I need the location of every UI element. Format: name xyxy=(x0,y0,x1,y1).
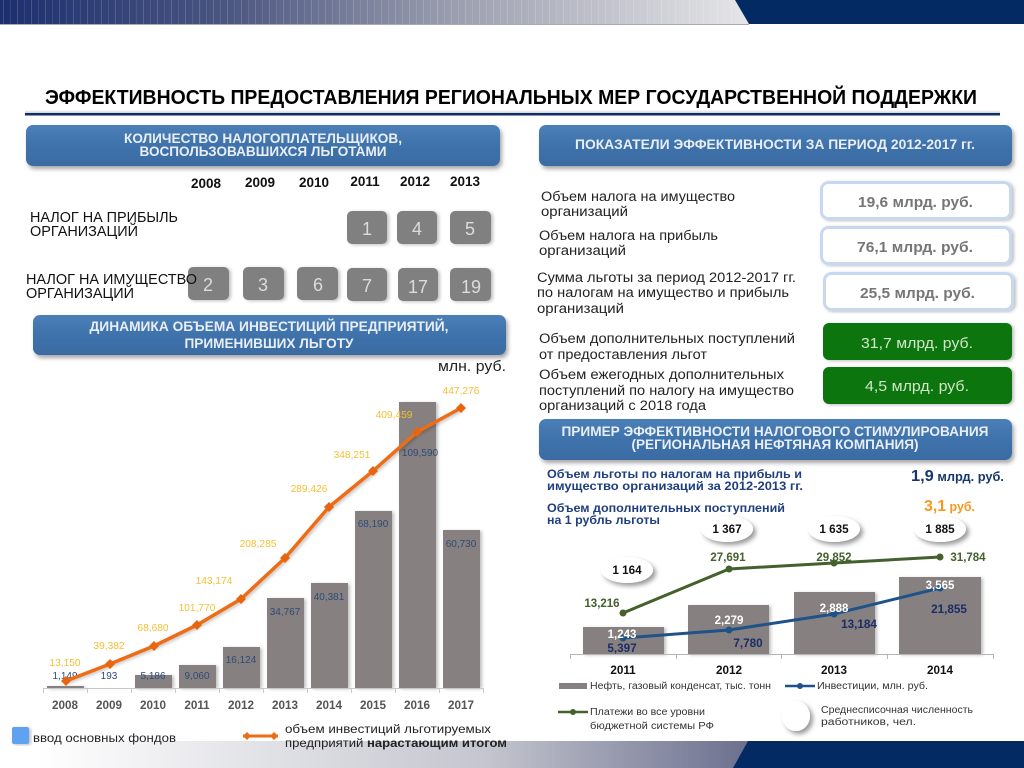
indicator text: annual revenue: организаций с 2018 года xyxy=(539,398,707,413)
indicator value: annual revenue xyxy=(823,367,1012,404)
count tiles: property tax: 17 xyxy=(408,277,428,297)
indicator text: additional revenue xyxy=(539,331,795,362)
line: cumulative investment xyxy=(61,403,466,686)
legend: fixed assets: ввод основных фондов xyxy=(33,731,176,745)
legend: average headcount: работников, чел. xyxy=(821,716,916,728)
x axis years: 2012 xyxy=(228,699,254,712)
x axis years: 2008 xyxy=(52,699,78,712)
panel: taxpayers count xyxy=(26,125,500,302)
relief volume value: 1,9 млрд. руб. xyxy=(911,468,1004,485)
revenue per ruble text: на 1 рубль льготы xyxy=(547,513,660,527)
heading: taxpayers xyxy=(26,125,500,166)
count tiles: property tax: 6 xyxy=(313,275,323,295)
revenue per ruble value: 3,1 руб. xyxy=(924,498,975,515)
heading: efficiency indicators: ПОКАЗАТЕЛИ ЭФФЕКТИВНОСТИ ЗА ПЕРИОД 2012-2017 гг. xyxy=(575,137,975,152)
legend: oil output: Нефть, газовый конденсат, тыс. тонн xyxy=(590,680,771,692)
relief volume text: Объем льготы по налогам на прибыль и xyxy=(547,467,802,481)
line value labels: 143,174 xyxy=(196,576,233,587)
line value labels: 39,382 xyxy=(93,641,125,652)
payment value labels xyxy=(584,552,986,610)
indicator value: total relief: 25,5 млрд. руб. xyxy=(860,286,975,302)
revenue per ruble text: Объем дополнительных поступлений xyxy=(547,501,785,515)
x axis years: 2015 xyxy=(360,699,386,712)
heading: oil company example: (РЕГИОНАЛЬНАЯ НЕФТЯНАЯ КОМПАНИЯ) xyxy=(632,437,918,452)
payment value labels: 13,216 xyxy=(584,598,620,610)
legend: cumulative investment: предприятий нарастающим итогом xyxy=(285,736,507,750)
investment value labels: 7,780 xyxy=(733,637,763,650)
legend: investments: Инвестиции, млн. руб. xyxy=(817,680,928,692)
bar value labels: 34,767 xyxy=(270,607,301,618)
indicator text: total relief: Сумма льготы за период 2012-2017 гг. xyxy=(537,270,796,285)
line value labels: 101,770 xyxy=(179,603,216,614)
heading: oil company example xyxy=(539,419,1012,460)
line value labels: 13,150 xyxy=(49,658,81,669)
line: investments xyxy=(620,584,944,642)
count tiles: property tax: 2 xyxy=(203,275,213,295)
x axis years xyxy=(610,664,953,677)
indicator text: annual revenue: поступлений по налогу на имущество xyxy=(539,383,794,398)
heading: taxpayers: ВОСПОЛЬЗОВАВШИХСЯ ЛЬГОТАМИ xyxy=(140,144,386,159)
bubbles: average headcount: 1 635 xyxy=(819,523,849,536)
investment value labels: 21,855 xyxy=(931,603,967,616)
row label: property tax: НАЛОГ НА ИМУЩЕСТВО xyxy=(26,272,197,288)
year headers xyxy=(191,174,481,191)
x axis years: 2014 xyxy=(927,664,953,677)
bottom banner xyxy=(0,741,1024,768)
indicator text: total relief xyxy=(537,270,796,316)
legend: investments xyxy=(785,680,928,692)
indicator text: profit tax: Объем налога на прибыль xyxy=(539,228,718,243)
payment value labels: 29,852 xyxy=(816,552,852,564)
x axis years: 2010 xyxy=(140,699,166,712)
bar value labels: 1,149 xyxy=(52,671,78,682)
bubbles: average headcount: 1 164 xyxy=(612,564,642,577)
oil output value labels: 2,279 xyxy=(715,615,743,627)
indicator text: profit tax: организаций xyxy=(539,243,626,258)
line value labels: 409,459 xyxy=(376,410,413,421)
indicator value: annual revenue: 4,5 млрд. руб. xyxy=(865,379,969,395)
chart axis xyxy=(44,688,484,693)
indicator text: property tax xyxy=(541,189,735,219)
year headers: 2010 xyxy=(299,175,329,190)
chart axis xyxy=(570,654,994,659)
line value labels: 447,276 xyxy=(443,386,480,397)
line: budget payments xyxy=(620,554,944,616)
investment value labels: 5,397 xyxy=(607,642,637,655)
indicator text: annual revenue: Объем ежегодных дополнительных xyxy=(539,367,784,382)
investment value labels: 13,184 xyxy=(841,618,877,631)
oil output value labels: 1,243 xyxy=(608,629,636,641)
indicator value: property tax xyxy=(822,182,1010,218)
legend: average headcount: Среднесписочная численность xyxy=(821,705,973,716)
bar value labels: 40,381 xyxy=(314,592,345,603)
bubbles: average headcount: 1 367 xyxy=(712,523,742,536)
legend: cumulative investment xyxy=(243,722,507,750)
year headers: 2009 xyxy=(245,175,275,190)
row label: profit tax xyxy=(30,210,178,240)
indicator value: total relief xyxy=(824,274,1012,310)
x axis years: 2014 xyxy=(316,699,342,712)
year headers: 2011 xyxy=(350,174,380,189)
bar value labels: 193 xyxy=(101,671,118,682)
indicator value: additional revenue: 31,7 млрд. руб. xyxy=(861,336,973,352)
indicator text: annual revenue xyxy=(539,367,794,413)
row label: property tax xyxy=(26,272,197,302)
legend: budget payments: Платежи во все уровни xyxy=(590,707,705,718)
x axis years: 2013 xyxy=(272,699,298,712)
count tiles: profit tax: 5 xyxy=(465,219,475,239)
legend: budget payments: бюджетной системы РФ xyxy=(590,720,714,732)
x axis years: 2016 xyxy=(404,699,430,712)
payment value labels: 31,784 xyxy=(950,552,986,564)
x axis years: 2011 xyxy=(184,699,210,712)
indicator text: additional revenue: Объем дополнительных поступлений xyxy=(539,331,795,346)
bar value labels: 5,186 xyxy=(140,671,166,682)
oil output value labels: 2,888 xyxy=(820,603,849,615)
relief volume text: имущество организаций за 2012-2013 гг. xyxy=(547,479,803,493)
line value labels: 348,251 xyxy=(334,450,371,461)
panel: investment dynamics xyxy=(12,315,507,750)
x axis years: 2009 xyxy=(96,699,122,712)
oil output value labels: 3,565 xyxy=(926,580,955,592)
heading: investment dynamics xyxy=(33,315,506,355)
count tiles: profit tax: 4 xyxy=(412,219,422,239)
heading: efficiency indicators xyxy=(539,125,1012,166)
heading: taxpayers: КОЛИЧЕСТВО НАЛОГОПЛАТЕЛЬЩИКОВ, xyxy=(124,131,402,146)
row label: profit tax: НАЛОГ НА ПРИБЫЛЬ xyxy=(30,210,178,226)
bar chart: oil output xyxy=(583,577,981,654)
bar value labels: 9,060 xyxy=(184,671,210,682)
indicator text: total relief: организаций xyxy=(537,301,624,316)
indicator value: property tax: 19,6 млрд. руб. xyxy=(858,195,973,211)
bar value labels xyxy=(52,448,477,682)
count tiles: property tax: 3 xyxy=(258,275,268,295)
oil output value labels xyxy=(608,580,955,641)
indicator text: additional revenue: от предоставления льгот xyxy=(539,347,707,362)
top banner xyxy=(0,0,1024,25)
investment value labels xyxy=(607,603,967,655)
bar value labels: 68,190 xyxy=(358,519,389,530)
x axis years: 2013 xyxy=(821,664,847,677)
indicator text: property tax: организаций xyxy=(541,204,628,219)
x axis years: 2011 xyxy=(610,664,636,677)
legend: cumulative investment: объем инвестиций льготируемых xyxy=(285,722,491,736)
indicator text: property tax: Объем налога на имущество xyxy=(541,189,735,204)
x axis years xyxy=(52,699,474,712)
panel: efficiency indicators xyxy=(537,125,1012,413)
row label: profit tax: ОРГАНИЗАЦИЙ xyxy=(30,222,138,240)
heading: investment dynamics: ПРИМЕНИВШИХ ЛЬГОТУ xyxy=(184,336,354,351)
indicator value: additional revenue xyxy=(823,323,1012,360)
unit label: млн. руб. xyxy=(438,359,506,375)
bar value labels: 109,590 xyxy=(402,448,439,459)
revenue per ruble text xyxy=(547,501,785,527)
count tiles: profit tax xyxy=(347,211,491,244)
bar value labels: 60,730 xyxy=(446,539,477,550)
count tiles: property tax xyxy=(188,267,491,301)
count tiles: property tax: 19 xyxy=(461,277,481,297)
year headers: 2013 xyxy=(450,174,481,189)
bar value labels: 16,124 xyxy=(226,655,257,666)
heading: oil company example: ПРИМЕР ЭФФЕКТИВНОСТИ НАЛОГОВОГО СТИМУЛИРОВАНИЯ xyxy=(562,424,988,439)
legend: average headcount xyxy=(782,701,973,731)
row label: property tax: ОРГАНИЗАЦИЙ xyxy=(26,284,134,302)
indicator text: total relief: по налогам на имущество и прибыль xyxy=(537,285,789,300)
x axis years: 2017 xyxy=(448,699,474,712)
line value labels: 289,426 xyxy=(291,484,328,495)
bubbles: average headcount xyxy=(601,516,966,583)
count tiles: profit tax: 1 xyxy=(362,219,372,239)
year headers: 2012 xyxy=(400,174,430,189)
count tiles: property tax: 7 xyxy=(362,276,372,296)
bubbles: average headcount: 1 885 xyxy=(925,523,955,536)
indicator value: profit tax: 76,1 млрд. руб. xyxy=(857,240,973,256)
bar chart: fixed asset input xyxy=(47,402,480,688)
legend: budget payments xyxy=(558,707,714,732)
line value labels: 208,285 xyxy=(240,539,277,550)
payment value labels: 27,691 xyxy=(710,552,746,564)
line value labels: 68,680 xyxy=(137,623,169,634)
title: ЭФФЕКТИВНОСТЬ ПРЕДОСТАВЛЕНИЯ РЕГИОНАЛЬНЫХ МЕР ГОСУДАРСТВЕННОЙ ПОДДЕРЖКИ xyxy=(45,85,977,109)
indicator text: profit tax xyxy=(539,228,718,258)
line value labels xyxy=(49,386,480,669)
panel: oil company example xyxy=(539,419,1012,732)
indicator value: profit tax xyxy=(822,228,1010,264)
x axis years: 2012 xyxy=(716,664,742,677)
relief volume text xyxy=(547,467,803,493)
year headers: 2008 xyxy=(191,176,222,191)
heading: investment dynamics: ДИНАМИКА ОБЪЕМА ИНВЕСТИЦИЙ ПРЕДПРИЯТИЙ, xyxy=(90,319,448,334)
legend: fixed assets xyxy=(12,727,176,745)
